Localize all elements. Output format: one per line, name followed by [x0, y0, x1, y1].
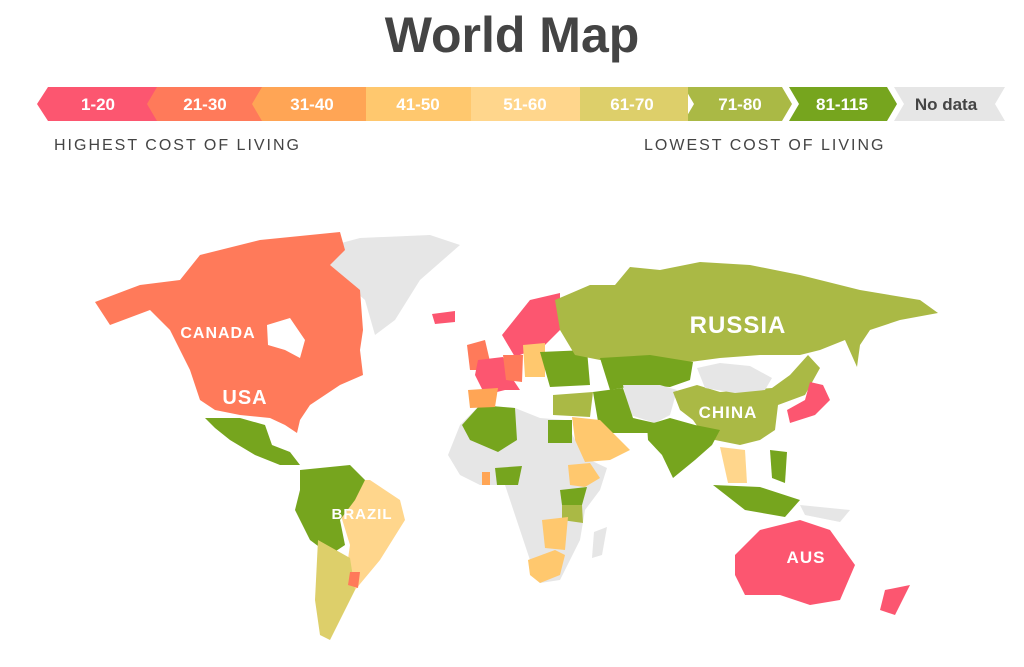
- country labels: AUS: [787, 548, 825, 567]
- country labels: CANADA: [180, 325, 256, 342]
- legend: 21-30: [183, 95, 227, 114]
- india: [647, 418, 720, 478]
- mexico: [205, 418, 300, 465]
- country labels: [180, 312, 825, 567]
- legend: 41-50: [396, 95, 440, 114]
- label: highest: HIGHEST COST OF LIVING: [54, 137, 301, 154]
- australia: [735, 520, 855, 605]
- russia: [555, 262, 938, 367]
- china: [673, 355, 820, 445]
- legend: No data: [915, 95, 978, 114]
- legend: 71-80: [718, 95, 762, 114]
- africa: [448, 405, 607, 583]
- south america: [330, 480, 405, 590]
- label: lowest: LOWEST COST OF LIVING: [644, 137, 885, 154]
- legend: 81-115: [816, 95, 868, 114]
- legend: 61-70: [610, 95, 654, 114]
- north america: [95, 232, 363, 433]
- mongolia: [697, 363, 772, 393]
- middle east: [553, 392, 593, 417]
- title: World Map: [385, 7, 639, 63]
- legend: [37, 87, 1005, 121]
- country labels: RUSSIA: [690, 312, 786, 339]
- kazakhstan: [600, 355, 693, 390]
- country labels: CHINA: [699, 403, 757, 422]
- country labels: USA: [222, 387, 268, 409]
- country labels: BRAZIL: [332, 506, 392, 523]
- legend: 31-40: [290, 95, 334, 114]
- central asia: [623, 385, 677, 423]
- europe: [432, 311, 455, 324]
- legend: 51-60: [503, 95, 547, 114]
- greenland: [315, 235, 460, 335]
- legend: 1-20: [81, 95, 115, 114]
